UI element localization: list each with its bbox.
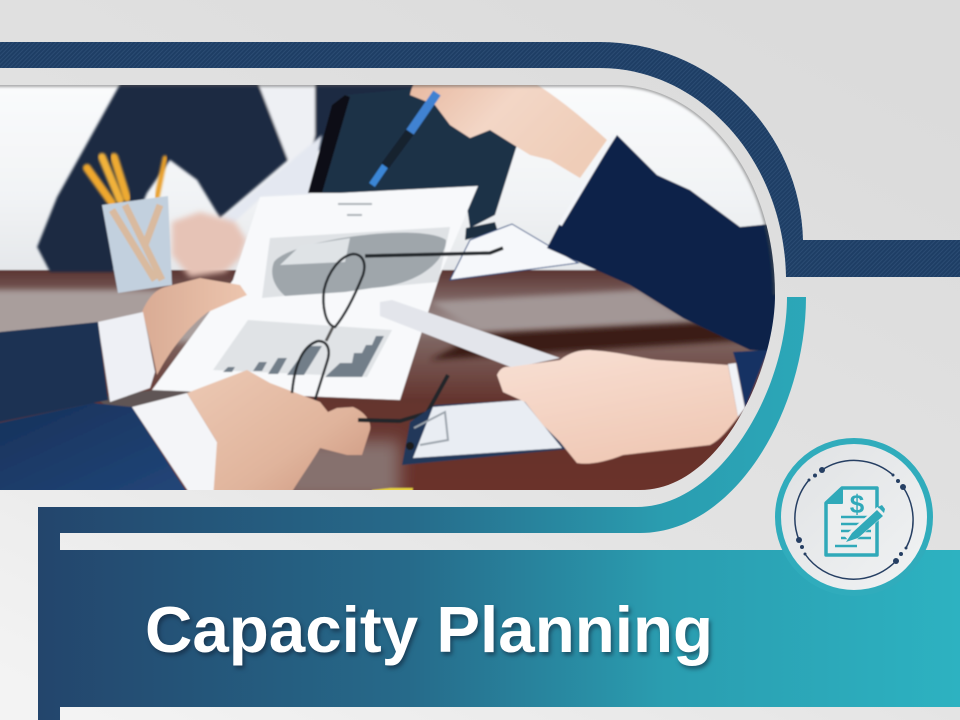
laptop <box>308 88 517 240</box>
pie chart <box>262 227 450 298</box>
yellow pencil <box>371 486 414 490</box>
right suit sleeve <box>547 135 790 352</box>
lower right cuff <box>728 363 745 417</box>
badge dotted ring <box>795 460 913 579</box>
upper left sleeve <box>0 322 108 426</box>
eyeglasses <box>292 248 503 421</box>
blurred paper <box>222 135 322 228</box>
upper right hand <box>410 75 607 178</box>
seated person in dark suit <box>37 75 420 272</box>
photo inner shadow <box>0 85 775 295</box>
clipboard <box>402 400 568 465</box>
paper on table behind <box>450 224 578 280</box>
badge disc <box>778 441 930 593</box>
photo backdrop wall <box>0 85 766 272</box>
blue pen <box>372 93 437 185</box>
upper left cuff <box>98 312 155 402</box>
table gap between sleeves <box>100 390 188 408</box>
lower right hand <box>497 350 738 464</box>
lower left sleeve <box>0 402 186 490</box>
navy curved band <box>0 42 960 277</box>
photo: business meeting <box>0 70 790 505</box>
main document with charts <box>152 186 478 400</box>
lower left hand <box>187 370 370 500</box>
lower table grey reflection <box>280 440 400 500</box>
blurred seated hand <box>172 212 246 277</box>
right cuff edge <box>558 150 610 228</box>
bar chart <box>213 320 392 377</box>
icon badge: document with pen <box>778 441 930 593</box>
lower right sleeve <box>733 350 768 408</box>
dollar sign: $ <box>850 489 865 519</box>
upper left hand holding document <box>142 278 247 375</box>
receipt strip <box>380 300 560 368</box>
white shirt <box>255 75 315 160</box>
title: Capacity Planning <box>145 593 713 666</box>
teal and blue title panel <box>38 297 960 720</box>
document icon <box>826 488 885 555</box>
badge ring dots <box>796 467 908 564</box>
left table grey reflection <box>0 290 240 345</box>
pen <box>848 511 881 540</box>
lower left cuff <box>132 393 218 500</box>
table reflection band <box>430 290 690 332</box>
document heading lines <box>338 204 372 215</box>
pencil cup <box>87 157 172 293</box>
meeting table <box>0 270 790 505</box>
table dark shadow <box>430 322 750 360</box>
